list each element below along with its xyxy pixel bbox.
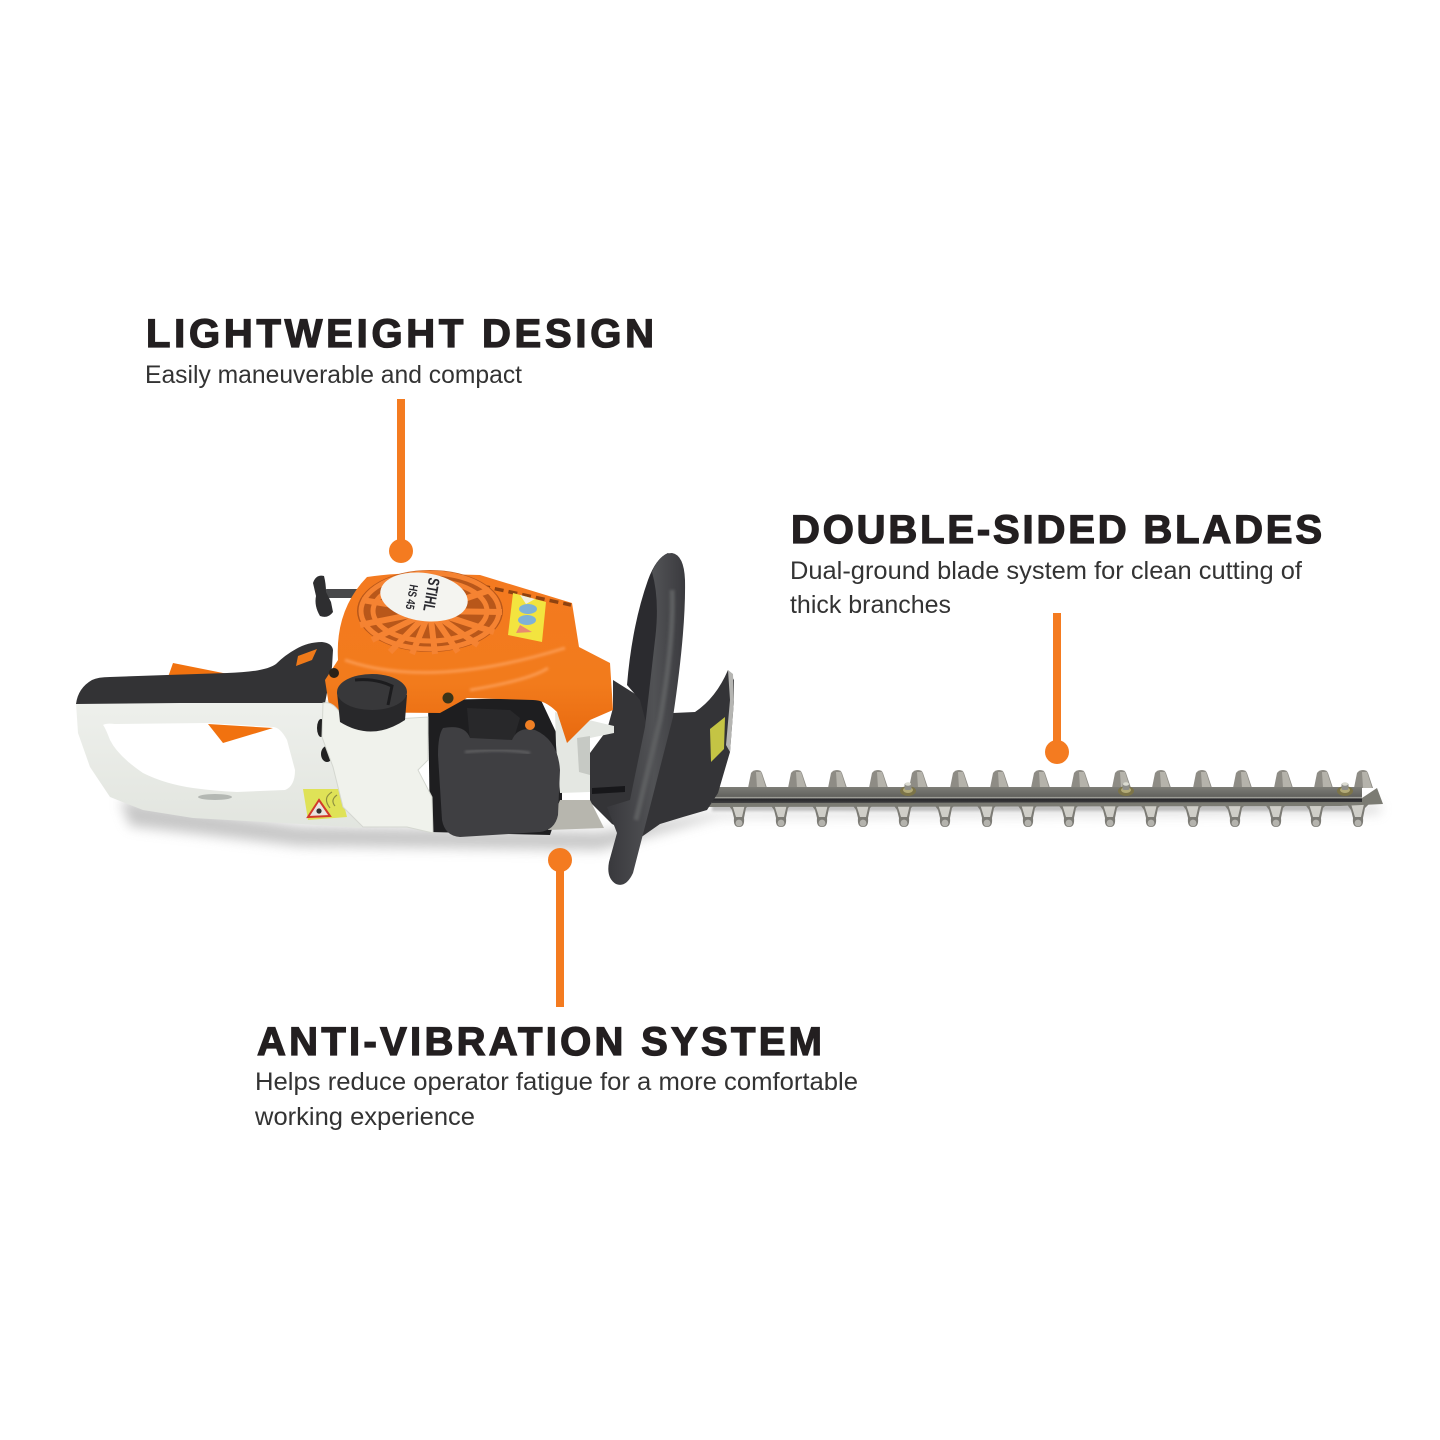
callout: anti-vibration system bbox=[254, 848, 858, 1131]
cover bolts bbox=[329, 668, 454, 704]
leader line bbox=[397, 399, 405, 545]
safety label icons bbox=[516, 595, 537, 633]
grille rings bbox=[373, 581, 487, 641]
blade bar bbox=[712, 787, 1362, 803]
callout: lightweight design bbox=[145, 312, 654, 563]
leader line bbox=[556, 866, 564, 1007]
warning triangle bbox=[308, 800, 330, 817]
yellow safety label bbox=[508, 593, 546, 642]
warning sticker bbox=[303, 789, 347, 820]
model text: HS 45 bbox=[403, 583, 421, 611]
hedge trimmer product illustration bbox=[76, 553, 1383, 885]
heading: DOUBLE-SIDED BLADES bbox=[791, 508, 1322, 552]
heading: LIGHTWEIGHT DESIGN bbox=[146, 312, 654, 356]
fuel tank bbox=[322, 703, 433, 833]
housing shadow detail bbox=[592, 786, 625, 794]
white section shade bbox=[577, 736, 590, 775]
leader dot bbox=[389, 539, 413, 563]
air filter clip bbox=[467, 708, 520, 745]
STIHL logo text: STIHL bbox=[419, 576, 442, 613]
air filter cover bbox=[438, 727, 560, 837]
starter pull cord bbox=[313, 576, 369, 617]
orange engine cover bbox=[325, 567, 613, 743]
cutting blade assembly bbox=[708, 770, 1383, 827]
cover highlight bbox=[345, 648, 565, 690]
fan grille bbox=[357, 570, 503, 654]
leader dot bbox=[548, 848, 572, 872]
leader line bbox=[1053, 613, 1061, 746]
white centre section bbox=[555, 712, 614, 793]
description second line: thick branches bbox=[790, 591, 951, 619]
cover vent slits bbox=[440, 577, 571, 605]
handle slot bbox=[198, 794, 232, 800]
description: Helps reduce operator fatigue for a more comfortable bbox=[255, 1068, 858, 1096]
ground shadow bbox=[120, 800, 1380, 850]
lower blade teeth bbox=[727, 803, 1370, 827]
warning symbol bbox=[316, 808, 322, 814]
sticker vibration arcs bbox=[326, 792, 337, 808]
blade shadow bbox=[712, 803, 1362, 811]
upper blade teeth bbox=[748, 770, 1373, 788]
front handle loop bbox=[607, 553, 685, 885]
callout: double-sided blades bbox=[790, 508, 1322, 764]
fuel cap bbox=[337, 674, 407, 732]
description: Dual-ground blade system for clean cutting of bbox=[790, 557, 1302, 585]
air filter highlight bbox=[465, 750, 530, 753]
description: Easily maneuverable and compact bbox=[145, 361, 522, 389]
handle back arm bbox=[627, 553, 680, 730]
lower blade plate bbox=[708, 788, 1383, 807]
heading: ANTI-VIBRATION SYSTEM bbox=[257, 1020, 822, 1064]
handle front arm bbox=[607, 553, 685, 885]
shield highlight bbox=[726, 670, 734, 752]
rear handle white frame bbox=[76, 700, 362, 828]
upper trigger bbox=[167, 663, 243, 680]
leader dot bbox=[1045, 740, 1069, 764]
blade bolts bbox=[900, 782, 1353, 796]
rear handle grip bbox=[76, 642, 333, 704]
metal base plate bbox=[548, 800, 604, 830]
orange primer dot bbox=[525, 720, 535, 730]
dark linkage behind tank bbox=[317, 719, 333, 762]
grille spokes bbox=[360, 590, 502, 654]
white badge disc bbox=[377, 567, 471, 627]
dark engine internals bbox=[428, 698, 562, 835]
lower trigger bbox=[208, 724, 273, 743]
throttle lock bbox=[296, 649, 317, 666]
gear housing and shield bbox=[590, 670, 734, 838]
shield warning label bbox=[710, 717, 725, 762]
handle highlight bbox=[636, 590, 672, 820]
description second line: working experience bbox=[254, 1103, 475, 1131]
